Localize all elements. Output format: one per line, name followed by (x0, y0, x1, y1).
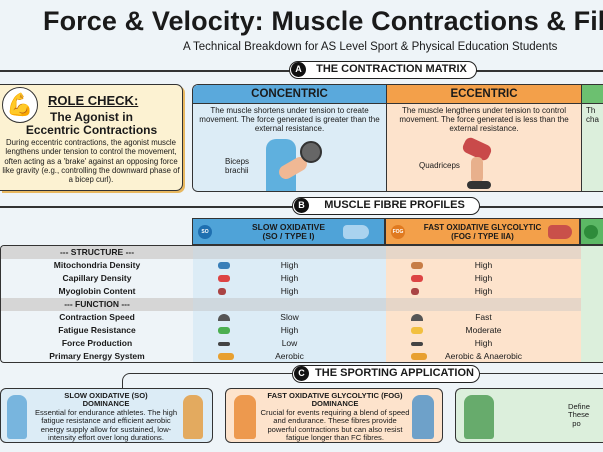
column: isometric (cut): Th (586, 106, 595, 115)
column: concentric: CONCENTRIC (251, 88, 328, 100)
card: SO dominance (0, 388, 213, 443)
header: FG (cut) (580, 218, 603, 245)
column: eccentric (386, 85, 581, 193)
section A header: THE CONTRACTION MATRIX (316, 63, 467, 75)
table: muscle fibre profiles: High (475, 338, 492, 348)
card: FOG dominance: FAST OXIDATIVE GLYCOLYTIC (FOG) (267, 391, 403, 400)
column: isometric (cut): cha (586, 115, 599, 124)
table: muscle fibre profiles: High (475, 273, 492, 283)
section C header: C (298, 368, 305, 378)
table: muscle fibre profiles: Slow (280, 312, 299, 322)
card: FG dominance (cut): Define (568, 402, 590, 411)
section B header (292, 197, 480, 215)
section C header: THE SPORTING APPLICATION (315, 367, 474, 379)
header: FOG: FOG (393, 229, 403, 235)
table: muscle fibre profiles: Myoglobin Content (59, 286, 135, 296)
table: muscle fibre profiles: Contraction Speed (59, 312, 135, 322)
subheading (26, 110, 157, 137)
subheading: The Agonist in (50, 110, 133, 124)
section A header (289, 61, 477, 79)
section B header: B (298, 200, 305, 210)
header: slow oxidative: (SO / TYPE I) (263, 231, 314, 241)
column: eccentric: ECCENTRIC (450, 88, 518, 100)
text block: During eccentric contractions, the agonist muscle lengthens under tension to control the movement, often acting as a 'brake' against an opposing force like gravity (e.g., controlling the downward phase of a bicep curl). (2, 138, 180, 184)
column: eccentric: The muscle lengthens under tension to control movement. The force generated is less than the external resistance. (399, 106, 569, 133)
panel: contraction matrix (192, 84, 603, 192)
table: muscle fibre profiles: Fast (475, 312, 492, 322)
column: concentric (193, 85, 386, 193)
header: FOG: (FOG / TYPE IIA) (451, 232, 514, 241)
column: concentric: Biceps (225, 157, 249, 166)
card: SO dominance: Essential for endurance athletes. The high fatigue resistance and efficient aerobic energy supply allow for sustained, low-intensity effort over long durations. (35, 408, 177, 442)
table: muscle fibre profiles: High (475, 286, 492, 296)
icon: flexed arm (2, 87, 38, 123)
icon: squatting legs (462, 138, 492, 189)
table: muscle fibre profiles: High (475, 260, 492, 270)
table: muscle fibre profiles: Fatigue Resistance (58, 325, 136, 335)
section B header: MUSCLE FIBRE PROFILES (324, 199, 465, 211)
card: FOG dominance: DOMINANCE (312, 399, 358, 408)
header: FOG: FAST OXIDATIVE GLYCOLYTIC (424, 223, 541, 232)
card: SO dominance: DOMINANCE (83, 399, 129, 408)
table: muscle fibre profiles: Force Production (62, 338, 132, 348)
header: slow oxidative: SLOW OXIDATIVE (252, 222, 325, 232)
panel: role check (0, 84, 183, 191)
card: FOG dominance (225, 388, 443, 443)
table: muscle fibre profiles: --- FUNCTION --- (64, 299, 130, 309)
header: slow oxidative (192, 218, 385, 245)
card: FOG dominance: Crucial for events requiring a blend of speed and endurance. These fibres provide powerful contractions but can also resist fatigue longer than FC fibres. (260, 408, 410, 442)
card: FG dominance (cut) (455, 388, 603, 443)
column: isometric (cut) (581, 85, 603, 193)
table: muscle fibre profiles: High (281, 286, 298, 296)
header: FOG (385, 218, 580, 245)
table: muscle fibre profiles: Capillary Density (62, 273, 131, 283)
table: muscle fibre profiles: Primary Energy System (49, 351, 145, 361)
table: muscle fibre profiles: High (281, 260, 298, 270)
header: slow oxidative: SO (201, 229, 209, 235)
icon: runner (7, 395, 27, 439)
table: muscle fibre profiles: Low (282, 338, 297, 348)
section A header: A (295, 64, 302, 74)
table: muscle fibre profiles: High (281, 325, 298, 335)
table: muscle fibre profiles: Mitochondria Density (54, 260, 140, 270)
table: muscle fibre profiles: Moderate (466, 325, 501, 335)
subheading: Eccentric Contractions (26, 123, 157, 137)
table: muscle fibre profiles: Aerobic & Anaerobic (445, 351, 522, 361)
card: FG dominance (cut): These (568, 410, 589, 419)
table: muscle fibre profiles: --- STRUCTURE --- (60, 247, 134, 257)
subtitle: A Technical Breakdown for AS Level Sport & Physical Education Students (183, 41, 557, 53)
column: concentric: brachii (225, 166, 249, 175)
card: SO dominance: SLOW OXIDATIVE (SO) (64, 391, 148, 400)
section C header (292, 365, 480, 383)
column: concentric: The muscle shortens under tension to create movement. The force generated is greater than the external resistance. (199, 106, 380, 133)
table: muscle fibre profiles (0, 218, 603, 363)
connector lines for section C (122, 373, 603, 388)
column: eccentric: Quadriceps (419, 161, 460, 170)
table: muscle fibre profiles: Aerobic (275, 351, 304, 361)
icon: flexed arm: 💪 (6, 92, 34, 117)
icon: bicep curl (266, 139, 322, 191)
heading: role check: ROLE CHECK: (48, 93, 138, 108)
table: muscle fibre profiles: High (281, 273, 298, 283)
card: FG dominance (cut): po (572, 419, 581, 428)
